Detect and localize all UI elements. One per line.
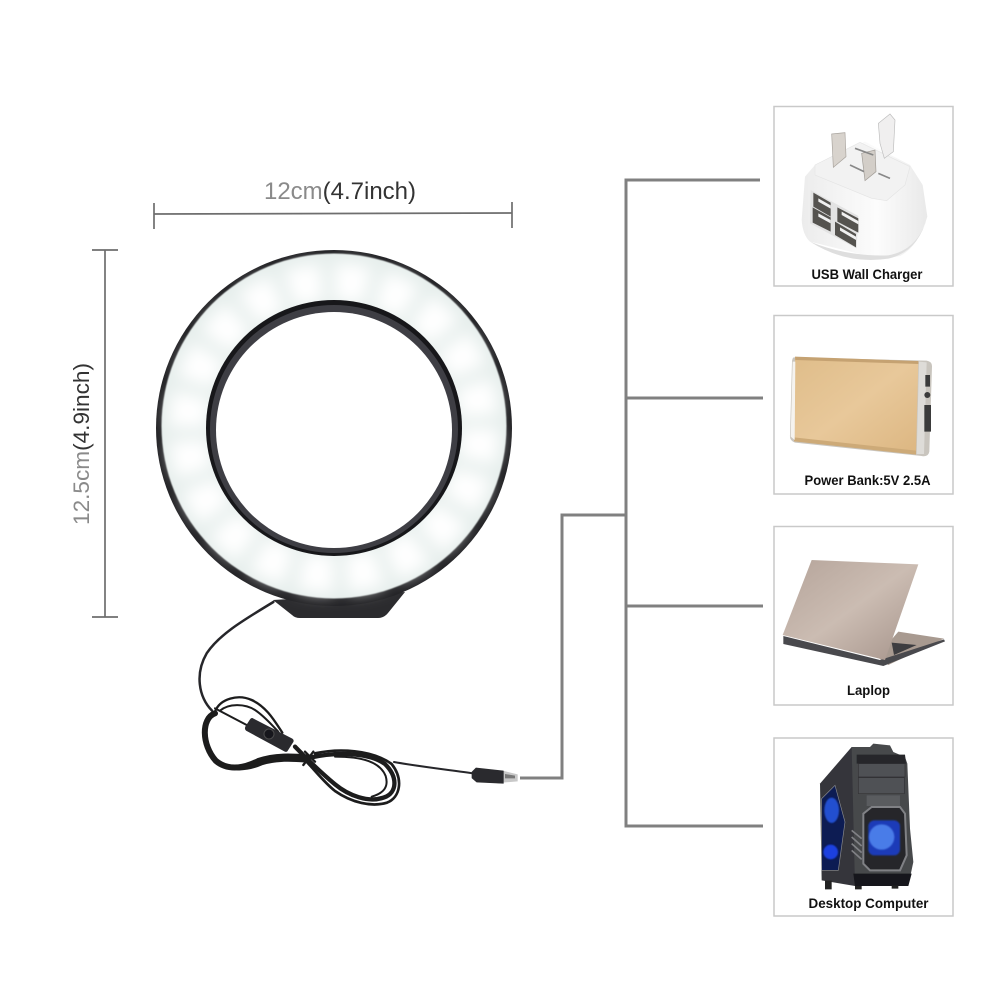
- height dimension line: [92, 250, 118, 617]
- label: Power Bank:5V 2.5A: [804, 472, 930, 488]
- upper strands: [215, 697, 282, 733]
- connector lines: [520, 180, 763, 826]
- icon: wall charger: [802, 114, 927, 260]
- width dimension label: 12cm(4.7inch): [264, 178, 416, 205]
- charger body: [802, 142, 927, 258]
- laptop lid: [783, 560, 918, 660]
- cable tie: [303, 752, 315, 765]
- panel: USB wall charger: [774, 106, 953, 286]
- ring base: [273, 592, 405, 618]
- switch button: [264, 729, 274, 739]
- coiled cable: [205, 697, 399, 804]
- ring body: [156, 250, 512, 606]
- label markings: [850, 148, 890, 178]
- top edge shading: [795, 357, 918, 364]
- keyboard deck: [877, 632, 944, 665]
- power bank silver edge: [790, 357, 932, 456]
- charger top face: [815, 142, 910, 201]
- illuminated diffuser: [162, 254, 506, 598]
- LED glow: [188, 282, 480, 574]
- height dimension label: 12.5cm(4.9inch): [69, 363, 94, 525]
- lower case: [853, 874, 912, 886]
- tower front: [852, 744, 913, 886]
- icon: desktop tower: [820, 744, 913, 889]
- label: Laplop: [847, 682, 890, 698]
- blue fan window: [863, 807, 907, 870]
- panel: power bank: [774, 316, 953, 494]
- panel: laptop: [774, 526, 953, 705]
- USB plug metal: [503, 771, 518, 783]
- ring light: [156, 250, 512, 618]
- laptop base edge: [783, 636, 945, 666]
- front top panel: [857, 755, 906, 764]
- left highlight: [791, 362, 795, 440]
- width dimension line: [154, 202, 512, 229]
- gold face: [794, 357, 918, 454]
- USB port panel: [810, 190, 858, 248]
- cable to ring and plug: [200, 602, 518, 783]
- feet: [825, 881, 898, 889]
- icon: laptop: [783, 560, 945, 666]
- USB cable with switch: [200, 602, 518, 804]
- side window: [822, 785, 845, 870]
- inner black rim: [206, 300, 462, 556]
- label: Desktop Computer: [808, 895, 929, 911]
- drive bays: [858, 764, 905, 794]
- icon: power bank: [790, 357, 932, 456]
- USB plug body: [472, 768, 503, 783]
- right bundle: [295, 747, 394, 799]
- USB ports: [813, 193, 858, 247]
- ports strip: [917, 362, 927, 454]
- body underside shading: [810, 217, 927, 260]
- panel: desktop computer: [774, 738, 953, 916]
- plug pins: [832, 133, 846, 167]
- label: USB Wall Charger: [812, 266, 923, 282]
- side vents: [852, 830, 862, 859]
- inline switch: [245, 718, 294, 752]
- ring opening: [216, 312, 452, 548]
- lower edge shading: [794, 437, 916, 455]
- tower side: [820, 747, 858, 886]
- left bundle: [205, 713, 308, 767]
